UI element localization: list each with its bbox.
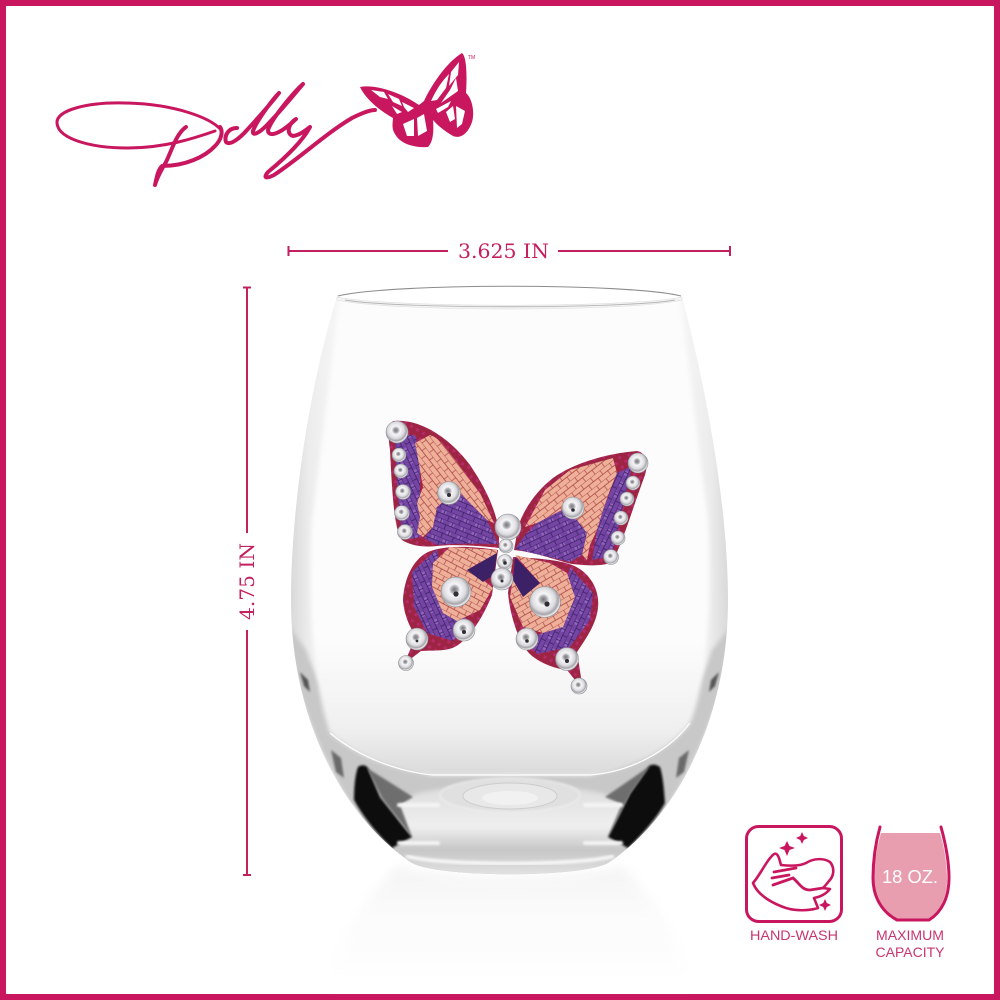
label: maximum capacity: MAXIMUM [876, 927, 944, 943]
rhinestone facets [416, 493, 575, 663]
fingers [772, 868, 823, 890]
wing: upper left [389, 421, 499, 548]
logo butterfly [360, 53, 475, 147]
glass reflection [326, 866, 694, 985]
inner bowl [311, 389, 710, 774]
hands [753, 854, 833, 910]
width dimension: 3.625 in [288, 239, 730, 263]
rhinestones [386, 421, 648, 694]
capacity value: 18 OZ. [882, 867, 938, 887]
care icon: hand-wash [746, 826, 842, 922]
wing: lower right [508, 555, 598, 690]
wing: lower left [403, 547, 498, 664]
glass base [395, 785, 625, 878]
brand logo: Dolly signature with butterfly [57, 53, 475, 185]
glass rim [337, 286, 682, 309]
dark refraction crescents [354, 765, 412, 848]
wing: upper right [514, 451, 647, 565]
sparkles [779, 832, 831, 911]
mosaic butterfly [386, 421, 648, 694]
lower glass shading [292, 389, 727, 874]
trademark mark: TM [468, 55, 475, 61]
label: maximum capacity: CAPACITY [876, 944, 945, 960]
signature script [57, 84, 375, 185]
height dimension: 4.75 in [235, 287, 259, 875]
glass body [291, 297, 728, 874]
height dimension: 4.75 in: 4.75 IN [235, 543, 259, 620]
stemless wine glass [288, 286, 732, 880]
label: hand-wash: HAND-WASH [750, 927, 838, 943]
capacity icon: glass [873, 827, 949, 920]
width dimension: 3.625 in: 3.625 IN [458, 239, 549, 263]
icon frame [746, 826, 842, 922]
